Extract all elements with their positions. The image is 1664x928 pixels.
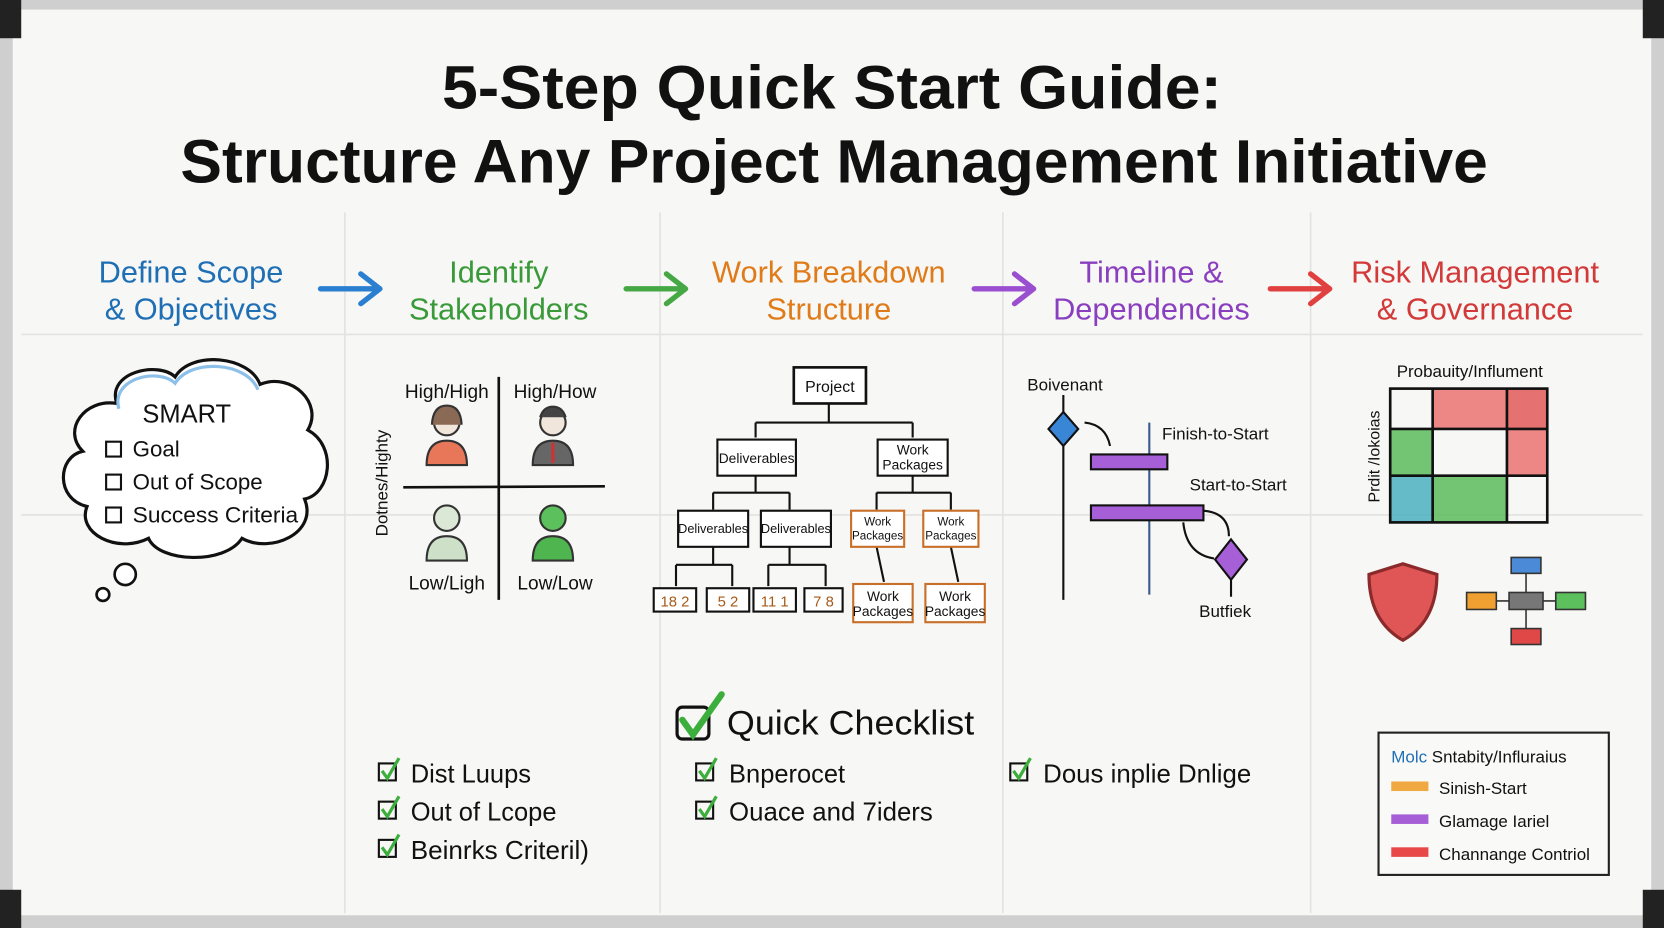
WBS tree: Packages [925,604,985,619]
step headers [99,254,1599,327]
WBS tree: Deliverables [761,521,831,536]
WBS tree: Work [939,589,971,604]
risk matrix [1367,362,1547,522]
risk matrix: Probauity/Influment [1397,362,1543,381]
WBS tree: Packages [852,529,903,542]
cloud: SMART: Goal [133,437,180,462]
step 1 heading: & Objectives [105,292,277,327]
WBS tree: Packages [882,457,943,472]
WBS tree: 7 8 [813,594,834,610]
timeline: Finish-to-Start [1162,425,1269,444]
step 1 heading: Define Scope [99,254,283,289]
step 3 heading: Structure [766,292,891,327]
timeline: Boivenant [1027,376,1103,395]
legend: Sinish-Start [1439,779,1527,798]
arrow 3 [974,274,1034,304]
arrow 4 [1270,274,1330,304]
step 4 heading [1053,254,1250,327]
step 5 heading: & Governance [1377,292,1573,327]
title [180,53,1488,197]
WBS tree: Deliverables [719,451,795,466]
stakeholder matrix: High/High [405,382,489,403]
icon: shield [1369,564,1437,640]
WBS tree: Packages [853,604,913,619]
step 3 heading [712,254,946,327]
WBS tree: Deliverables [678,521,748,536]
step 2 heading: Identify [449,254,549,289]
checklist [379,694,1251,865]
legend: Molc Sntabity/Influraius [1391,747,1567,766]
checklist: Beinrks Criteril) [411,837,589,865]
checklist heading: Quick Checklist [727,705,975,743]
timeline: Start-to-Start [1190,476,1287,495]
icon: governance flow [1467,557,1585,645]
cloud: SMART [63,360,327,601]
WBS tree: 5 2 [718,594,738,610]
step 2 heading [409,254,589,327]
step 2 heading: Stakeholders [409,292,589,327]
checklist: Dous inplie Dnlige [1043,761,1251,789]
WBS tree: Packages [925,529,977,542]
step 3 heading: Work Breakdown [712,254,946,289]
WBS tree: 11 1 [761,594,789,610]
legend: Glamage Iariel [1439,812,1549,831]
WBS tree: 18 2 [660,594,689,610]
title: 5-Step Quick Start Guide: [442,53,1222,122]
stakeholder matrix: Low/Low [517,573,593,594]
step 4 heading: Dependencies [1053,292,1250,327]
cloud: SMART: SMART [142,401,231,429]
arrow 1 [320,274,380,304]
checklist: Out of Lcope [411,799,556,827]
checklist: Dist Luups [411,761,531,789]
stakeholder matrix: High/How [514,382,597,403]
timeline [1027,376,1287,621]
checklist: Bnperocet [729,761,845,789]
checklist: Ouace and 7iders [729,799,933,827]
step 1 heading [99,254,283,327]
step 4 heading: Timeline & [1079,254,1224,289]
WBS tree: Work [867,589,899,604]
WBS tree [654,367,985,622]
WBS tree: Project [805,379,855,396]
arrow 2 [626,274,686,304]
person icons [427,406,573,561]
title: Structure Any Project Management Initiative [180,128,1488,197]
stakeholder matrix [372,377,605,600]
risk matrix: Prdit /Iokoias [1367,411,1384,503]
WBS tree: Work [864,516,891,529]
step 5 heading [1351,254,1599,327]
step 5 heading: Risk Management [1351,254,1599,289]
arrows [320,274,1330,304]
WBS tree: Work [937,516,965,529]
cloud: SMART: Success Criteria [133,502,299,527]
legend [1379,733,1609,875]
checklist heading [677,694,975,743]
stakeholder matrix: Dotnes/Highty [372,429,391,536]
cloud: SMART: Out of Scope [133,469,263,494]
WBS tree: Work [897,442,929,457]
timeline: Butfiek [1199,602,1252,621]
stakeholder matrix: Low/Ligh [409,573,485,594]
legend: Channange Contriol [1439,845,1590,864]
